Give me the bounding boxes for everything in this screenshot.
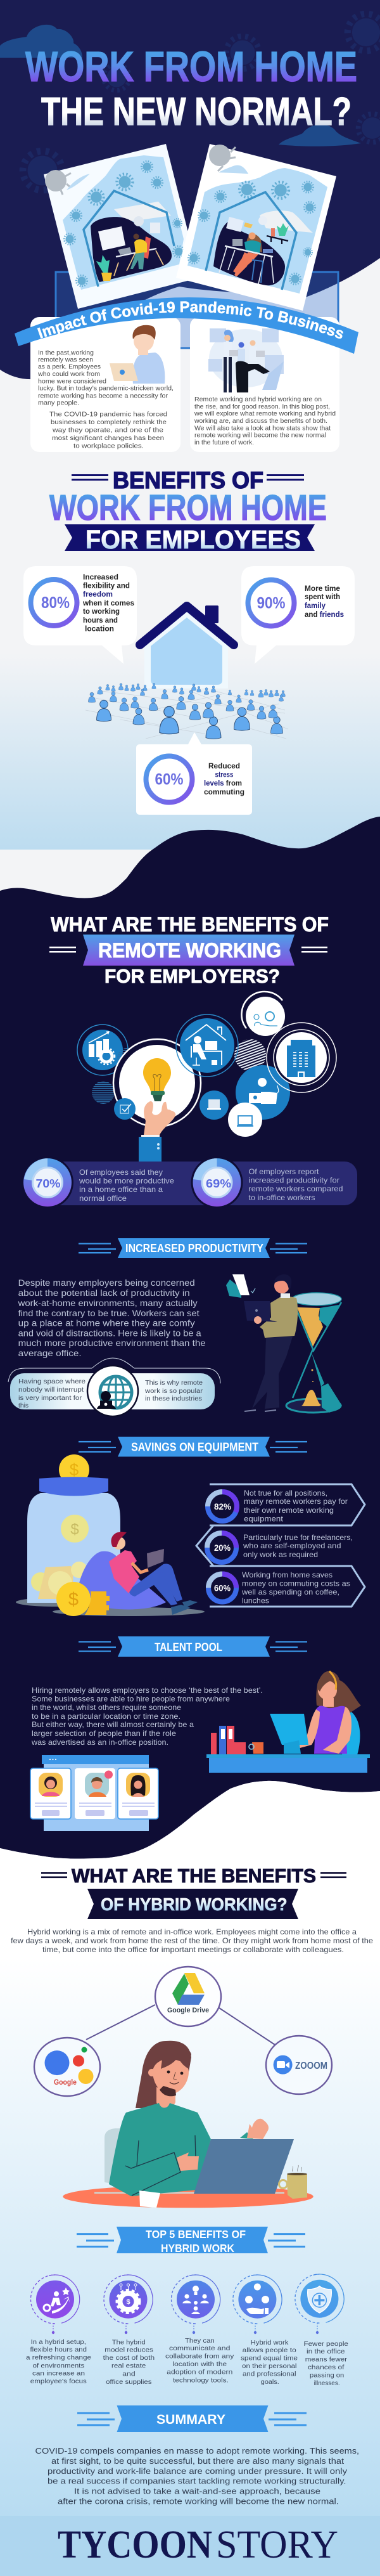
callout: 80%: hours and [83,617,118,625]
benefit: work-life balance: and professional [243,2371,296,2378]
benefit: flexible focus: flexible hours and [30,2346,87,2353]
benefit: communicate: technology tools. [173,2377,229,2384]
callout: 90%: and friends [305,611,344,619]
stat: 69%: increased productivity for [248,1175,339,1184]
stat: 60%: Working from home saves [242,1570,332,1579]
section banner: summary: SUMMARY [156,2412,225,2427]
section banner: savings on equipment [79,1437,307,1457]
text: productivity paragraph: Despite many employers being concerned [18,1278,195,1288]
pill: globe callout: is very important for [18,1394,82,1402]
text: intro right: We will also take a look at how stats show that [194,425,331,432]
stat: 70%: in a home office than a [79,1185,163,1194]
heading: benefits of work from home [49,467,327,554]
bubble: google: Google [54,2079,77,2087]
pill: globe callout: This is why remote [145,1379,203,1387]
pill: globe callout: in these industries [145,1395,202,1402]
background: navy header [0,0,380,379]
section banner: top 5 benefits: TOP 5 BENEFITS OF [146,2228,246,2241]
benefit: reduced cost [103,2269,158,2386]
text: talent pool paragraph: larger selection of people than if the role [32,1730,176,1738]
stat: 69%: to in-office workers [248,1193,315,1202]
callout: 90% [241,566,355,664]
benefit: work-life balance: allows people to [243,2347,296,2354]
illustration: house [140,605,234,689]
section banner: top 5 benefits: HYBRID WORK [161,2242,234,2255]
callout: 80%: freedom [83,591,113,599]
stat: 69%: 69% [206,1177,231,1190]
background: footer band [0,2516,380,2576]
background: hybrid section gradient [0,1959,380,2516]
callout: 60%: commuting [204,789,244,796]
benefit: flexible focus: a refreshing change [26,2355,91,2361]
pill: globe callout: work is so popular [144,1387,203,1395]
logo: tycoonstory [58,2523,338,2566]
stat: 20%: only work as required [243,1550,318,1559]
illustration: savings jar and person: $ [70,1521,79,1538]
icon: remote worker globe [241,992,285,1036]
text: talent pool paragraph: Some businesses are able to hire people from anywhere [32,1695,230,1703]
text: summary [35,2446,359,2506]
text: hybrid intro: few days a week, and work from home the rest of the time. Or they might work from home most of the [11,1937,373,1945]
section banner: top 5 benefits [77,2227,305,2255]
text: talent pool paragraph: in the world, whilst others require someone [32,1704,181,1712]
section banner: increased productivity [79,1238,307,1258]
card: candidate two [75,1768,115,1819]
text: summary: be a real success if companies start tackling remote working structurally. [48,2476,346,2485]
bubble: google [34,2038,100,2096]
heading: benefits of hybrid working: WHAT ARE THE BENEFITS [72,1865,316,1887]
benefit: communicate: collaborate from any [165,2353,234,2360]
heading: benefits of work from home: BENEFITS OF [113,467,263,493]
benefit: reduced cost: and [122,2371,136,2378]
icon: small laptop badge [200,1091,229,1120]
stat: 69%: remote workers compared [248,1184,343,1193]
stat: 82%: many remote workers pay for [244,1497,348,1506]
stat: 70% [22,1156,174,1208]
heading: benefits of remote working: REMOTE WORKING [98,939,281,962]
stat: 70%: Of employees said they [79,1168,163,1177]
icon: pet and laptop [236,1065,290,1120]
stat: 60%: lunches [242,1596,269,1605]
icon: office building [267,1023,336,1092]
benefit: flexible focus: In a hybrid setup, [31,2339,86,2346]
text: intro right: the rise, and for good reason. In this blog post, [194,403,330,411]
benefit: flexible focus [26,2269,91,2385]
text: intro left: remotely was seen [38,356,93,364]
illustration: woman on laptop [63,2041,314,2208]
text: intro left: many people. [38,399,79,407]
card: candidate one [30,1768,71,1819]
benefit: reduced cost: $ [126,2298,130,2306]
illustration: people network [86,683,288,739]
benefit: reduced cost: the cost of both [103,2355,155,2362]
heading: benefits of hybrid working: OF HYBRID WORKING? [101,1894,288,1914]
heading: benefits of hybrid working [41,1865,346,1919]
bubble: zoom: ZOOOM [295,2061,327,2071]
stat: 20%: Particularly true for freelancers, [243,1533,353,1542]
callout: 80%: to working [83,608,120,616]
benefit: health shield: Fewer people [304,2341,348,2348]
stat: 82%: 82% [214,1501,232,1511]
callout: 80% [23,566,137,664]
illustration: savings jar and person: $ [68,1589,79,1610]
benefit: reduced cost: office supplies [106,2379,152,2386]
stat: 60% [208,1566,365,1607]
callout: 60%: Reduced [208,763,240,770]
text: productivity paragraph: work-at-home environments, many actually [18,1298,198,1308]
text: productivity paragraph: and void of distractions. Here is likely to be a [18,1329,201,1338]
text: intro left [37,349,174,450]
text: intro left: The COVID-19 pandemic has forced [49,411,167,418]
blue box behind cards [56,272,338,348]
stat: 82%: equipment [244,1514,284,1523]
text: intro right: Remote working and hybrid working are on [194,396,322,403]
icon: home office [176,1014,238,1077]
benefit: health shield: chances of [308,2364,345,2371]
decorative hatched circles [92,1039,266,1104]
text: intro left: remote working has become a necessity for [38,392,168,399]
heading: benefits of remote working: WHAT ARE THE BENEFITS OF [51,913,329,936]
stat arrows [196,1484,365,1607]
text: summary: It is not advised to take a wait-and-see approach, because [74,2487,320,2495]
heading: benefits of remote working [49,913,329,987]
callout: 90%: spent with [305,593,340,601]
stat: 60%: well as spending on coffee, [241,1588,339,1596]
illustration: woman at desk [206,1671,370,1773]
benefit: communicate: adoption of modern [167,2369,233,2376]
text: productivity paragraph: find the contrary to be true. Workers can set [18,1309,200,1318]
benefit: work-life balance: on their personal [242,2363,296,2370]
stat: 70%: 70% [35,1177,61,1190]
background: lower gradient [0,653,380,850]
callout: 80%: 80% [41,594,70,612]
benefit: work-life balance [233,2269,298,2386]
card: right intro [190,317,339,452]
background clouds and viruses [0,14,380,190]
bubble: google drive: Google Drive [167,2007,209,2014]
icon: white laptop [228,1103,262,1137]
illustration: man with laptop [110,325,165,384]
icon cluster [77,992,336,1162]
text: productivity paragraph: about the potential lack of productivity in [18,1288,190,1298]
icon: bar chart and gear [77,1025,128,1075]
card: candidate three [118,1768,158,1819]
benefit: health shield: means fewer [305,2356,348,2364]
callout: 90%: 90% [257,595,285,612]
text: talent pool paragraph: But either way, there will almost certainly be a [32,1721,194,1729]
pill: globe callout: nobody will interrupt [18,1386,84,1394]
icon: checkbox [114,1098,136,1120]
benefit: health shield: passing on [310,2372,345,2379]
benefit: communicate: communicate and [169,2345,231,2352]
text: intro right: we will explore what remote working and hybrid [194,410,336,417]
illustration: man with hourglass [226,1274,342,1413]
text: summary: COVID-19 compels companies en masse to adopt remote working. This seems, [35,2446,359,2456]
banner: impact of covid-19: Impact Of Covid-19 Pandemic To Business [37,301,343,339]
benefit: communicate: They can [185,2338,215,2345]
text: summary: after the corona crisis, remote working will become the new normal. [58,2497,339,2506]
callout: 60% [136,732,252,815]
text: talent pool paragraph: was advertised as an in-office position. [31,1738,168,1747]
benefit: flexible focus: can increase an [32,2370,85,2378]
background: dark employers section [0,817,380,1859]
callout: 90%: More time [305,585,340,593]
callout: 60%: 60% [155,771,184,789]
text: hybrid intro [11,1928,373,1954]
text: talent pool paragraph [31,1686,263,1747]
text: intro right: working are, and discuss the benefits of both. [194,417,327,425]
text: intro left: way they operate, and one of the [52,426,163,434]
heading: benefits of remote working: FOR EMPLOYERS? [104,965,280,987]
text: intro right: remote working will become the new normal [194,431,326,439]
callout: 80%: location [85,625,114,633]
text: intro left: who could work from [37,370,100,378]
text: intro left: In the past,working [38,349,94,356]
benefit: health shield [295,2269,350,2387]
callout: 60%: levels from [204,780,242,787]
text: productivity paragraph: up a place at home where they are comfy [18,1319,195,1328]
stat: 69% [191,1156,343,1208]
section banner: increased productivity: INCREASED PRODUCTIVITY [125,1242,263,1255]
text: talent pool paragraph: Hiring remotely allows employers to choose ‘the best of the best’. [32,1686,263,1695]
polaroid: left [44,144,200,309]
text: productivity paragraph [18,1278,206,1358]
section banner: talent pool: TALENT POOL [155,1641,222,1654]
stats panel: 70% and 69% [22,1156,357,1208]
stat: 60%: money on commuting costs as [242,1579,350,1588]
stat: 70%: normal office [79,1194,127,1203]
callout: 80%: Increased [83,574,118,581]
logo: tycoonstory: STORY [216,2523,338,2566]
callout: 90%: family [305,602,326,610]
text: intro left: most significant changes has been [52,434,164,442]
text: intro left: to workplace policies. [73,443,144,450]
bubble: google drive [155,1967,221,2026]
stat: 60%: 60% [214,1582,231,1593]
callout: 80%: when it comes [82,600,134,607]
benefit: work-life balance: goals. [261,2379,279,2386]
polaroid: right [176,144,336,311]
illustration: savings jar and person: $ [70,1460,79,1479]
icon: light bulb in hand [113,1039,201,1162]
bubble: zoom [266,2036,332,2094]
stat: 69%: Of employers report [248,1167,319,1176]
benefit: communicate [165,2269,234,2384]
benefit: reduced cost: model reduces [104,2347,153,2353]
stat: 20%: who are self-employed and [243,1541,341,1550]
stat: 82%: Not true for all positions, [244,1489,327,1498]
text: intro left: businesses to completely rethink the [51,418,167,426]
text: intro left: as a perk. Employees [38,363,101,370]
section banner: savings on equipment: SAVINGS ON EQUIPMENT [131,1440,258,1453]
benefit: reduced cost: real estate [111,2362,146,2370]
benefit: communicate: location with the [172,2361,227,2368]
text: summary: productivity and work-life balance are coming under pressure. It will only [48,2466,347,2476]
stat: 82%: their own remote working [244,1506,334,1515]
background: white hybrid top [0,1781,380,1959]
benefit: health shield: in the office [307,2348,345,2355]
benefit: health shield: illnesses. [314,2380,340,2387]
benefit: reduced cost: The hybrid [112,2340,146,2346]
text: intro left: home were considered [38,378,106,385]
section banner: summary [77,2405,307,2432]
illustration: team [208,328,284,392]
callout: 60%: stress [215,771,233,779]
pill: globe callout: this [18,1402,28,1409]
text: intro right: in the future of work. [194,439,254,446]
text: hybrid intro: time, but come into the office for important meetings or collaborate with colleagues. [42,1946,344,1954]
pill: globe callout [8,1358,220,1416]
pill: globe callout: Having space where [18,1378,86,1385]
card: left intro [30,317,180,452]
benefit: work-life balance: spend equal time [241,2355,298,2362]
benefit: flexible focus: employee's focus [30,2378,87,2385]
title [25,43,357,134]
text: productivity paragraph: average office. [18,1349,82,1358]
text: productivity paragraph: much more productive environment than the [18,1338,206,1348]
section banner: talent pool [79,1636,307,1657]
stat: 82% [208,1484,365,1525]
heading: benefits of work from home: FOR EMPLOYEES [86,525,301,554]
stat: 70%: would be more productive [79,1177,174,1186]
text: intro left: lucky. But in today's pandemic-stricken world, [38,384,174,392]
stat: 20% [196,1525,353,1566]
illustration: candidate cards [30,1755,158,1831]
benefit: work-life balance: Hybrid work [251,2340,289,2346]
text: hybrid intro: Hybrid working is a mix of remote and in-office work. Employees might come into the office a [27,1928,357,1936]
text: talent pool paragraph: to be in a particular location or time zone. [32,1712,180,1721]
text: intro right [194,396,336,446]
callout: 80%: flexibility and [83,582,130,590]
text: summary: at first sight, to be quite successful, but there are also many signals that [51,2456,344,2466]
logo: tycoonstory: TYCOON [58,2523,212,2566]
benefit: flexible focus: of environments [33,2362,84,2370]
connector lines [86,2005,275,2045]
illustration: savings jar and person [16,1454,205,1616]
stat: 20%: 20% [214,1543,231,1553]
